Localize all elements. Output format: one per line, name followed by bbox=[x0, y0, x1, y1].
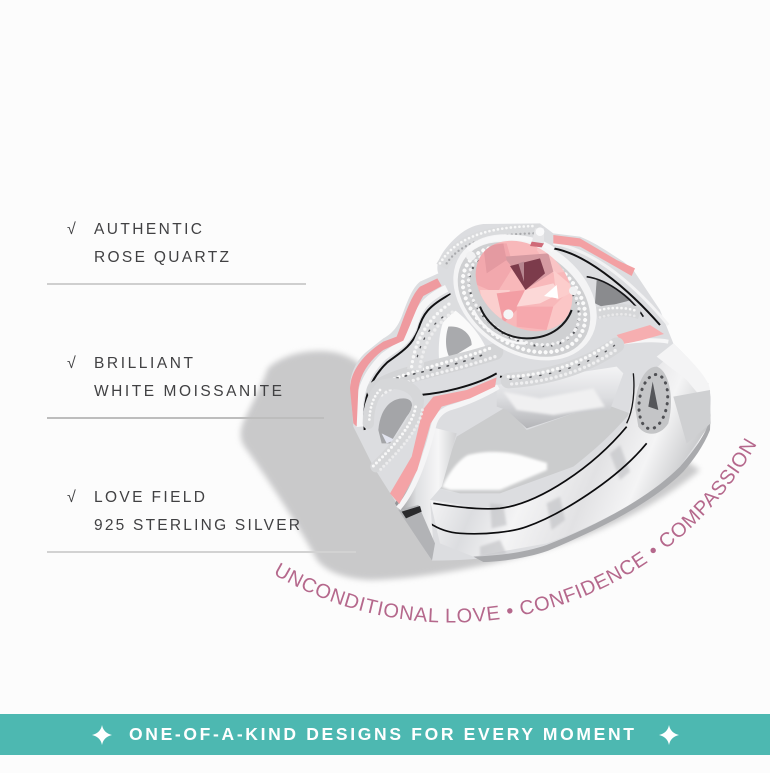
strand: lower twist bbox=[368, 384, 423, 469]
feature: rose quartz: AUTHENTIC bbox=[94, 221, 202, 238]
feature: sterling silver: √ bbox=[67, 489, 76, 506]
strand: crossing band bbox=[375, 348, 495, 395]
feature: white moissanite: WHITE MOISSANITE bbox=[94, 383, 282, 400]
prongs bbox=[466, 227, 578, 319]
feature: rose quartz bbox=[47, 221, 306, 285]
strand: lower right bbox=[508, 342, 618, 384]
curved tagline: UNCONDITIONAL LOVE • CONFIDENCE • COMPASSION bbox=[276, 438, 756, 622]
feature: rose quartz: √ bbox=[67, 221, 76, 238]
polished edges and black channels bbox=[359, 243, 668, 508]
icon: sparkle left bbox=[92, 725, 112, 745]
bottom banner bbox=[0, 714, 770, 755]
right side bands and engraved window bbox=[627, 343, 711, 443]
pink enamel bands bbox=[350, 235, 664, 504]
rose quartz stone bbox=[466, 227, 580, 333]
feature: sterling silver: LOVE FIELD bbox=[94, 489, 205, 506]
ring silhouette bbox=[350, 223, 711, 561]
feature: rose quartz: ROSE QUARTZ bbox=[94, 249, 229, 266]
ring illustration bbox=[350, 208, 711, 562]
feature: sterling silver: 925 STERLING SILVER bbox=[94, 517, 300, 534]
halo of stones bbox=[430, 208, 620, 386]
strand: top arc bbox=[440, 226, 540, 267]
ring cast shadow bbox=[241, 351, 700, 580]
strand: right eye bbox=[597, 308, 640, 317]
feature: sterling silver bbox=[47, 489, 356, 553]
feature: white moissanite bbox=[47, 355, 324, 419]
pave twist strands bbox=[368, 226, 640, 469]
ring opening bbox=[440, 407, 630, 493]
feature: white moissanite: √ bbox=[67, 355, 76, 372]
feature list bbox=[47, 221, 356, 553]
inner twist openings bbox=[378, 280, 632, 443]
strand: upper left twist bbox=[412, 300, 457, 370]
banner text: ONE-OF-A-KIND DESIGNS FOR EVERY MOMENT bbox=[129, 724, 634, 744]
shank under halo bbox=[497, 367, 623, 428]
icon: sparkle right bbox=[659, 725, 679, 745]
left end of band bbox=[395, 428, 457, 561]
feature: white moissanite: BRILLIANT bbox=[94, 355, 194, 372]
lower stacked bands bbox=[430, 357, 711, 562]
